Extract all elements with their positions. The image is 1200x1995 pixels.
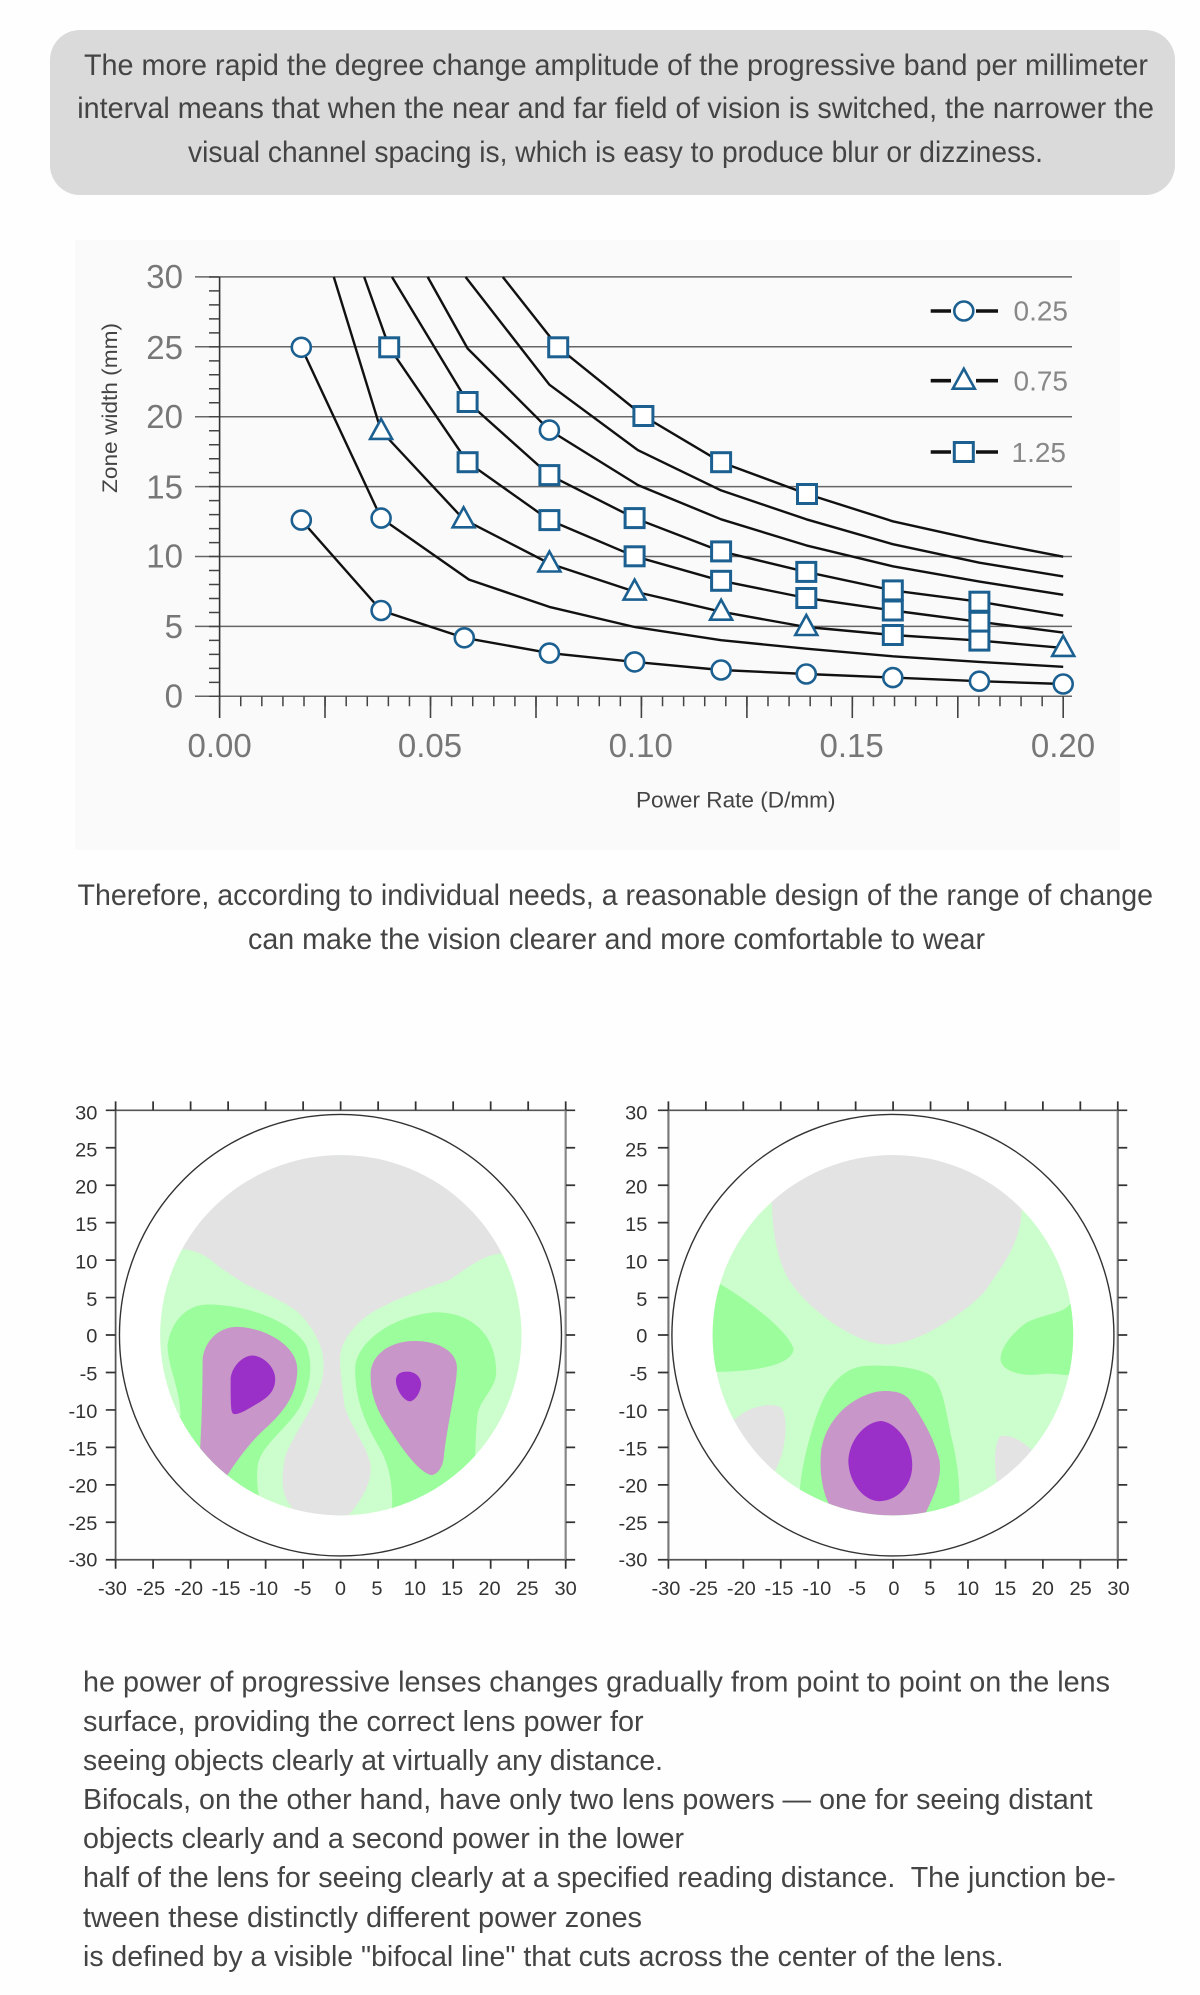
right lens contour zones — [712, 1155, 1074, 1516]
right map y labels: 10 — [625, 1252, 647, 1274]
left map y labels: -25 — [68, 1513, 97, 1535]
right map x labels: -25 — [689, 1578, 718, 1600]
left map x labels: -30 — [98, 1578, 127, 1600]
x axis tick labels: 0.05 — [398, 727, 462, 764]
chart gridlines and axes — [195, 276, 1072, 718]
left map y labels: 5 — [86, 1289, 97, 1311]
left map y labels: 0 — [86, 1326, 97, 1347]
right map x labels: 10 — [957, 1578, 979, 1600]
y axis tick labels: 10 — [146, 538, 183, 574]
left map y labels: 30 — [75, 1103, 97, 1125]
callout: rapid power change explanation — [50, 30, 1175, 195]
left map x labels: 25 — [516, 1578, 539, 1600]
left map y labels: -30 — [68, 1550, 97, 1572]
y axis tick labels — [146, 258, 183, 714]
data curves — [301, 277, 1063, 684]
right map x labels: 25 — [1069, 1578, 1092, 1600]
circle markers — [292, 338, 1073, 694]
right map x labels — [652, 1578, 1130, 1600]
right map x labels: -10 — [802, 1578, 831, 1600]
triangle markers — [370, 419, 1074, 656]
left map x labels: 0 — [335, 1578, 346, 1600]
x axis tick labels — [187, 727, 1095, 764]
right map y labels — [618, 1103, 647, 1572]
chart legend: 0.25 — [1014, 295, 1068, 326]
text block: progressive lenses versus bifocals: tween these distinctly different power zones — [83, 1902, 642, 1934]
y axis tick labels: 25 — [146, 329, 183, 366]
right map y labels: -30 — [618, 1550, 647, 1572]
y axis tick labels: 20 — [146, 398, 183, 435]
left lens outline — [119, 1114, 561, 1556]
right map x labels: -15 — [764, 1578, 793, 1600]
text block: progressive lenses versus bifocals — [83, 1667, 1116, 1973]
text block: progressive lenses versus bifocals: half of the lens for seeing clearly at a specified reading distance. The junction be- — [83, 1862, 1116, 1894]
left map x labels — [98, 1578, 577, 1600]
text block: reasonable design — [78, 879, 1153, 956]
right map y labels: -15 — [618, 1439, 647, 1460]
right map y labels: -10 — [618, 1401, 647, 1423]
x axis title: Power Rate (D/mm) — [636, 787, 836, 812]
right lens outline — [672, 1114, 1114, 1556]
text block: reasonable design: Therefore, according to individual needs, a reasonable design of the range of change — [78, 879, 1153, 912]
x axis tick labels: 0.20 — [1031, 727, 1095, 764]
left map y labels: -20 — [68, 1476, 97, 1498]
right map y labels: -25 — [618, 1513, 647, 1535]
left map x labels: -5 — [294, 1578, 311, 1600]
callout: rapid power change explanation: interval means that when the near and far field of vision is switched, the narrower the — [77, 92, 1154, 125]
y axis title: Zone width (mm) — [99, 323, 122, 493]
right map x labels: 15 — [994, 1578, 1016, 1600]
left map x labels: 30 — [555, 1578, 577, 1600]
left map y labels: 25 — [75, 1140, 97, 1161]
right map y labels: 25 — [625, 1140, 647, 1161]
right map y labels: 5 — [636, 1289, 647, 1311]
callout: rapid power change explanation: The more rapid the degree change amplitude of the progressive band per millimeter — [84, 49, 1148, 82]
square markers — [380, 338, 989, 650]
left lens contour zones — [160, 1155, 522, 1516]
right map x labels: -20 — [727, 1578, 756, 1600]
left map y labels: 20 — [75, 1177, 97, 1199]
y axis tick labels: 5 — [165, 608, 183, 645]
text block: reasonable design: can make the vision clearer and more comfortable to wear — [248, 923, 985, 956]
left map frame and ticks — [111, 1106, 571, 1564]
left map x labels: -15 — [212, 1578, 241, 1600]
y axis tick labels: 30 — [146, 258, 183, 295]
y axis tick labels: 15 — [146, 468, 183, 505]
left map x labels: 20 — [478, 1578, 501, 1600]
right map x labels: -5 — [848, 1578, 866, 1600]
line chart: zone width against power rate — [75, 240, 1120, 850]
right map y labels: 30 — [625, 1103, 647, 1125]
left map x labels: 10 — [404, 1578, 426, 1600]
x axis tick labels: 0.10 — [609, 727, 673, 764]
chart legend — [931, 295, 1068, 468]
left map y labels: -5 — [80, 1363, 97, 1385]
right map x labels: 20 — [1032, 1578, 1054, 1600]
chart legend: 1.25 — [1012, 437, 1066, 468]
left map y labels: -15 — [68, 1439, 97, 1460]
left map y labels — [68, 1103, 97, 1572]
right map x labels: 5 — [924, 1578, 935, 1600]
y axis tick labels: 0 — [165, 677, 183, 714]
left map x labels: -20 — [174, 1578, 203, 1600]
text block: progressive lenses versus bifocals: is defined by a visible "bifocal line" that cuts across the center of the lens. — [83, 1941, 1004, 1973]
right map y labels: -20 — [618, 1476, 647, 1498]
left map y labels: -10 — [68, 1401, 97, 1423]
left map x labels: -25 — [136, 1578, 165, 1600]
contour map: right lens — [618, 1103, 1130, 1600]
callout: rapid power change explanation: visual channel spacing is, which is easy to produce blur or dizziness. — [188, 136, 1043, 169]
x axis tick labels: 0.00 — [187, 727, 252, 764]
right map y labels: 15 — [625, 1214, 647, 1236]
right map y labels: 0 — [636, 1326, 647, 1347]
left map x labels: 15 — [441, 1578, 463, 1600]
left map x labels: 5 — [371, 1578, 383, 1600]
right map x labels: 0 — [888, 1578, 900, 1600]
right map x labels: -30 — [652, 1578, 680, 1600]
chart legend: 0.75 — [1014, 366, 1068, 397]
text block: progressive lenses versus bifocals: surface, providing the correct lens power for — [83, 1706, 644, 1738]
right map y labels: 20 — [625, 1177, 647, 1199]
text block: progressive lenses versus bifocals: he power of progressive lenses changes gradually from point to point on the lens — [83, 1667, 1110, 1699]
x axis tick labels: 0.15 — [819, 727, 884, 764]
left map y labels: 15 — [75, 1214, 97, 1236]
text block: progressive lenses versus bifocals: Bifocals, on the other hand, have only two lens powers — one for seeing distant — [83, 1784, 1093, 1816]
left map y labels: 10 — [75, 1252, 97, 1274]
left map x labels: -10 — [249, 1578, 278, 1600]
contour map: left lens — [68, 1103, 577, 1600]
text block: progressive lenses versus bifocals: objects clearly and a second power in the lower — [83, 1823, 684, 1855]
right map y labels: -5 — [630, 1363, 647, 1385]
right map frame and ticks — [663, 1106, 1123, 1564]
right map x labels: 30 — [1107, 1578, 1130, 1600]
text block: progressive lenses versus bifocals: seeing objects clearly at virtually any distance. — [83, 1745, 663, 1777]
